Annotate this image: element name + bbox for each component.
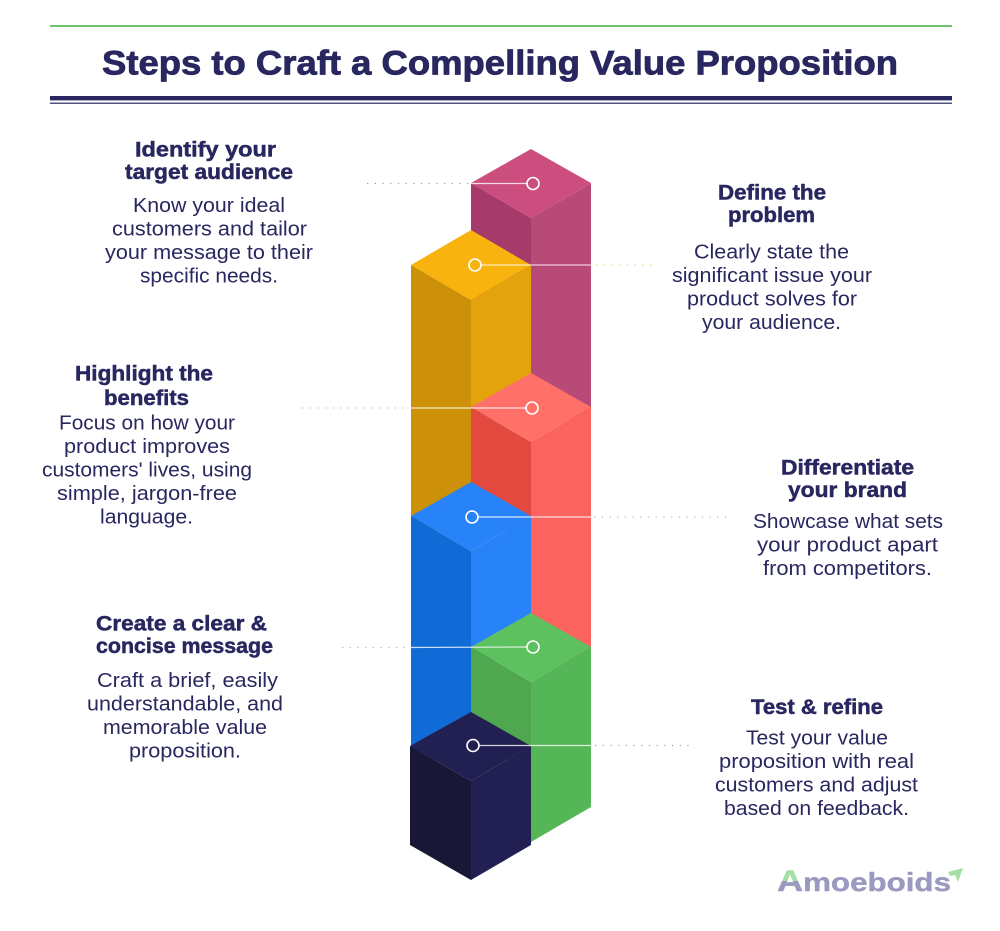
description [715, 726, 918, 820]
leader: test and refine [467, 740, 692, 752]
heading: Differentiate [781, 456, 914, 480]
description: customers and tailor [112, 218, 307, 240]
description: product improves [64, 435, 230, 458]
description [42, 412, 252, 528]
description [753, 510, 943, 580]
heading [125, 138, 293, 184]
block: red [471, 373, 591, 660]
description: Focus on how your [59, 412, 235, 434]
heading: Highlight the [75, 362, 213, 386]
block: blue [411, 482, 531, 760]
description: Showcase what sets [753, 510, 943, 533]
leader: highlight the benefits [302, 402, 538, 414]
description: from competitors. [763, 557, 932, 580]
description: memorable value [103, 716, 267, 739]
description: proposition. [129, 740, 241, 762]
heading: Define the [718, 182, 826, 204]
description: your product apart [757, 534, 938, 556]
heading: problem [728, 204, 815, 227]
heading [718, 182, 826, 227]
heading: Create a clear & [96, 612, 267, 636]
description: your message to their [105, 241, 313, 264]
heading: Test & refine [751, 696, 883, 719]
heading: target audience [125, 161, 293, 184]
description: based on feedback. [724, 797, 909, 820]
description: significant issue your [672, 264, 872, 287]
description: proposition with real [719, 750, 914, 773]
leader: create a clear and concise message [342, 641, 539, 653]
description: Clearly state the [694, 240, 849, 264]
description: Craft a brief, easily [97, 669, 279, 692]
heading: concise message [96, 635, 273, 658]
text block: identify your target audience [105, 138, 313, 288]
description [87, 669, 283, 762]
block: pink [471, 149, 591, 420]
heading: your brand [788, 479, 907, 502]
description: your audience. [702, 311, 841, 334]
block: green [471, 613, 591, 842]
text block: create a clear and concise message [87, 612, 283, 762]
leader: differentiate your brand [466, 511, 728, 523]
text block: test and refine [715, 696, 918, 820]
description: product solves for [687, 288, 857, 310]
leader: identify your target audience [367, 178, 539, 190]
heading: Identify your [135, 138, 276, 162]
block: navy [410, 712, 531, 880]
block: yellow [411, 230, 531, 530]
isometric block stack [410, 149, 591, 880]
text block: define the problem [672, 182, 872, 334]
description: specific needs. [140, 264, 278, 288]
heading: benefits [104, 387, 189, 410]
leader: define the problem [469, 259, 655, 271]
description: language. [100, 506, 193, 528]
description: Know your ideal [133, 194, 285, 217]
description: understandable, and [87, 692, 283, 716]
description: customers' lives, using [42, 458, 252, 482]
description: customers and adjust [715, 774, 918, 796]
description [105, 194, 313, 288]
heading [75, 362, 213, 410]
description [672, 240, 872, 334]
icon: green arrow [948, 868, 963, 882]
description: Test your value [746, 726, 888, 750]
logo: Amoeboids: Amoeboids [777, 865, 951, 898]
top green rule [50, 25, 952, 27]
title double underline [50, 96, 952, 104]
text block: highlight the benefits [42, 362, 252, 528]
title: Steps to Craft a Compelling Value Proposition [102, 44, 898, 82]
heading [781, 456, 914, 502]
description: simple, jargon-free [57, 482, 237, 505]
heading [96, 612, 273, 658]
text block: differentiate your brand [753, 456, 943, 580]
